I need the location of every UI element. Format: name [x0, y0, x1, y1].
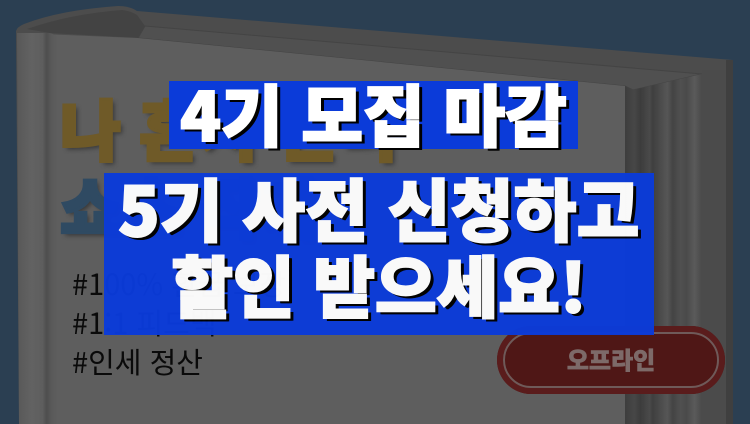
banner text line 2: 할인 받으세요!	[171, 235, 587, 332]
hashtag list	[72, 262, 286, 382]
book top inner groove	[27, 10, 145, 38]
banner text line 1: 5기 사전 신청하고	[118, 157, 640, 256]
button label: 오프라인	[567, 341, 655, 376]
book front cover	[42, 34, 625, 424]
book top band	[138, 26, 702, 90]
book spine strip	[17, 33, 58, 424]
banner text: 4기 모집 마감	[180, 64, 567, 161]
book right page block	[625, 74, 702, 424]
offline button	[497, 326, 725, 394]
heading line 2 on cover: 쇼츠 작가	[60, 157, 321, 253]
hashtag 1:1: #1:1 피드백	[72, 301, 217, 343]
banner: 5기 사전 신청	[104, 173, 654, 335]
hashtag tax: #인세 정산	[72, 340, 203, 382]
button inner outline	[503, 332, 719, 388]
book back cover edge	[702, 70, 733, 424]
hashtag 100%: #100% 환급 보장	[72, 262, 286, 304]
heading line 1 on cover: 나 혼자 쓴다	[60, 79, 401, 175]
banner: 4기 모집 마감	[169, 81, 578, 149]
